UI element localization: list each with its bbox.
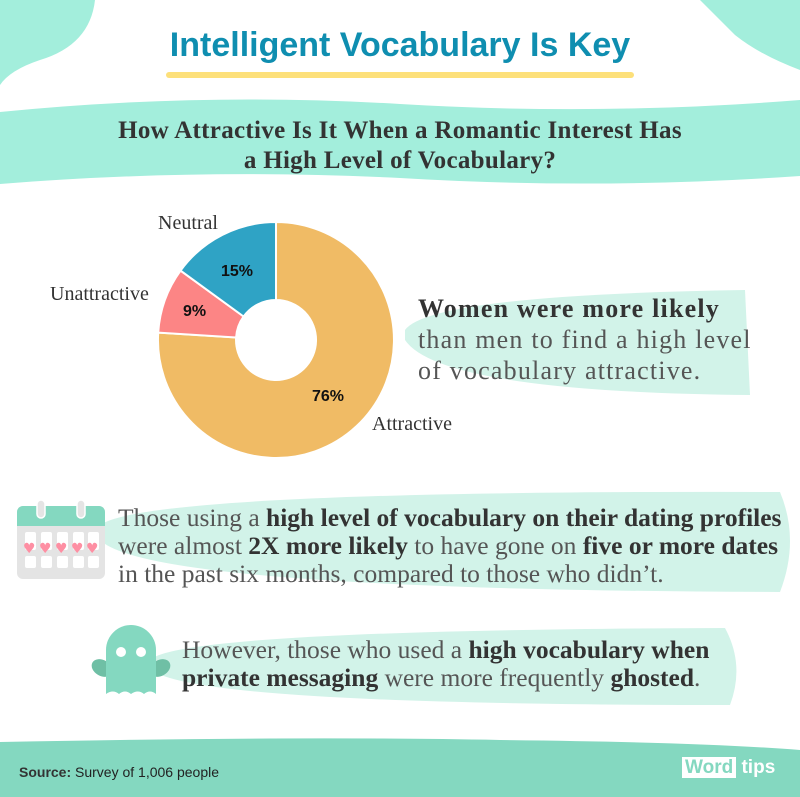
text: dating profiles: Those using a high level of vocabulary on their dating profiles xyxy=(118,503,782,532)
text: dating profiles: in the past six months, compared to those who didn’t. xyxy=(118,559,664,588)
donut chart: Neutral xyxy=(158,212,218,234)
subtitle heading: How Attractive Is It When a Romantic Interest Has xyxy=(118,117,682,144)
title underline xyxy=(166,72,634,78)
icon: ghost xyxy=(92,625,170,694)
text: ghosted: However, those who used a high vocabulary when xyxy=(182,635,709,664)
donut chart: Unattractive xyxy=(50,283,149,305)
callout: women: than men to find a high level xyxy=(418,325,752,354)
title: Intelligent Vocabulary Is Key xyxy=(170,26,630,64)
icon: calendar: ♥ xyxy=(39,541,52,557)
text: dating profiles: were almost 2X more likely to have gone on five or more dates xyxy=(118,531,778,560)
text: dating profiles xyxy=(118,503,782,588)
text: ghosted: private messaging were more frequently ghosted. xyxy=(182,663,700,692)
icon: calendar: ♥ xyxy=(71,541,84,557)
text: ghosted xyxy=(182,635,710,692)
subtitle heading xyxy=(118,117,682,174)
donut chart: 76% xyxy=(312,388,344,405)
donut chart: 9% xyxy=(183,303,206,320)
donut chart: 15% xyxy=(221,263,253,280)
logo: Word tips xyxy=(685,757,775,778)
callout: women xyxy=(418,294,752,385)
icon: calendar: ♥ xyxy=(86,541,99,557)
subtitle heading: a High Level of Vocabulary? xyxy=(244,147,556,174)
icon: calendar xyxy=(17,500,105,579)
source: Source: Survey of 1,006 people xyxy=(19,764,219,780)
donut chart xyxy=(50,212,452,457)
icon: calendar: ♥ xyxy=(55,541,68,557)
donut chart: Attractive xyxy=(372,413,452,435)
callout: women: of vocabulary attractive. xyxy=(418,356,701,385)
icon: calendar: ♥ xyxy=(23,541,36,557)
callout: women: Women were more likely xyxy=(418,294,720,323)
